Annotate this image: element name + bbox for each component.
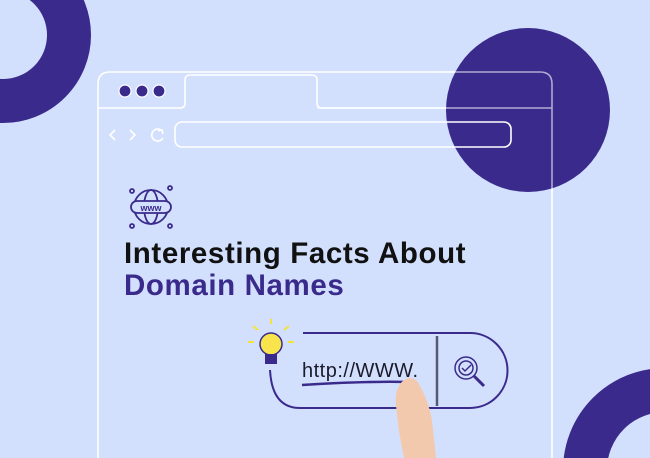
- browser window outline: [98, 72, 552, 458]
- title: Interesting Facts About: [124, 237, 466, 270]
- icon: globe www: www: [139, 203, 162, 213]
- title: Domain Names: [124, 269, 344, 302]
- decor: bottom-right ring: [585, 390, 650, 458]
- nav icons: [110, 129, 163, 141]
- icon: search check: [455, 357, 484, 386]
- decor: top-left ring: [0, 0, 69, 101]
- hand: [396, 378, 436, 458]
- icon: lightbulb: [248, 319, 294, 364]
- address bar: [175, 122, 511, 147]
- decor: right purple circle: [446, 28, 610, 192]
- search bar pill: [270, 333, 508, 408]
- icon: globe www: [130, 186, 172, 228]
- title: [124, 237, 466, 302]
- url text: http://WWW.: [302, 360, 419, 382]
- window dots: [119, 85, 165, 97]
